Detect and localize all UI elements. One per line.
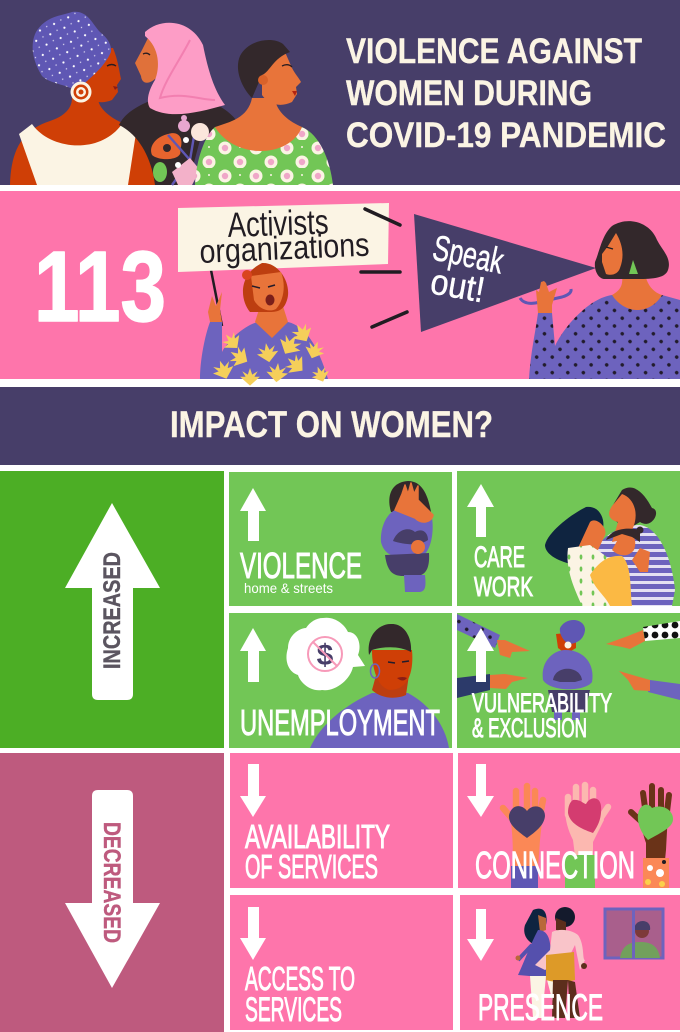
decreased label: DECREASED	[98, 822, 125, 943]
arrow down	[65, 790, 160, 988]
arrow down	[240, 907, 266, 960]
tile: availability	[230, 753, 453, 888]
seated woman	[543, 620, 593, 720]
woman with turban	[10, 12, 156, 185]
tile: vulnerability	[457, 613, 680, 748]
tile: unemployment	[229, 613, 452, 748]
walking women	[516, 907, 587, 1018]
label: ACCESS TO	[245, 960, 355, 997]
thought bubble no money	[286, 618, 365, 690]
label: VULNERABILITY	[472, 688, 612, 718]
family	[545, 488, 675, 606]
middle hand with heart	[565, 785, 608, 888]
panel: impact heading	[0, 387, 680, 465]
tile: violence: home & streets	[244, 580, 333, 596]
arrow down	[467, 909, 494, 961]
arrow up	[65, 503, 160, 700]
tile: violence	[229, 472, 452, 606]
noise lines	[361, 209, 407, 327]
leaf print	[210, 319, 332, 386]
arrow down	[467, 764, 494, 817]
label: AVAILABILITY	[245, 818, 390, 855]
woman	[310, 624, 449, 748]
pointing hands	[457, 614, 680, 700]
arrow up	[240, 628, 266, 682]
increased label: INCREASED	[99, 552, 126, 669]
panel: impact heading: IMPACT ON WOMEN?	[170, 404, 493, 445]
woman with hijab	[119, 23, 236, 185]
tile: care work: WORK	[474, 571, 533, 602]
arrow down	[240, 764, 266, 817]
right hand with heart	[631, 786, 673, 888]
activist woman	[200, 263, 332, 386]
arrow up	[467, 484, 494, 537]
window	[605, 909, 663, 958]
placard: Activists	[227, 202, 329, 245]
panel: header	[0, 0, 680, 185]
panel: increased	[0, 471, 224, 748]
tile: connection	[458, 753, 680, 888]
placard	[178, 202, 389, 272]
arrow up	[240, 488, 266, 541]
placard pole	[211, 270, 222, 326]
number 113: 113	[34, 231, 166, 343]
flowers	[151, 115, 209, 185]
tile: access	[230, 895, 453, 1030]
thought bubble no money: $	[317, 639, 334, 672]
megaphone: Speak	[429, 227, 508, 282]
placard: organizations	[199, 226, 370, 270]
megaphone	[414, 214, 596, 332]
arrow up	[467, 628, 494, 682]
panel: activists speak out	[0, 191, 680, 386]
label: PRESENCE	[478, 987, 603, 1028]
tile: access: SERVICES	[245, 991, 342, 1029]
tile: vulnerability: & EXCLUSION	[472, 713, 587, 743]
label: VIOLENCE	[240, 545, 362, 586]
panel: decreased	[0, 753, 224, 1032]
tile: care work	[457, 471, 680, 606]
label: CARE	[474, 541, 525, 574]
tile: presence	[460, 895, 680, 1030]
woman with short hair	[195, 40, 333, 185]
woman with megaphone	[529, 221, 680, 379]
title	[346, 32, 666, 155]
left hand with heart	[503, 786, 545, 888]
label: UNEMPLOYMENT	[240, 702, 440, 743]
crouching woman	[381, 481, 433, 592]
megaphone: out!	[428, 261, 488, 310]
tile: availability: OF SERVICES	[245, 848, 378, 885]
title: WOMEN DURING	[346, 74, 592, 113]
